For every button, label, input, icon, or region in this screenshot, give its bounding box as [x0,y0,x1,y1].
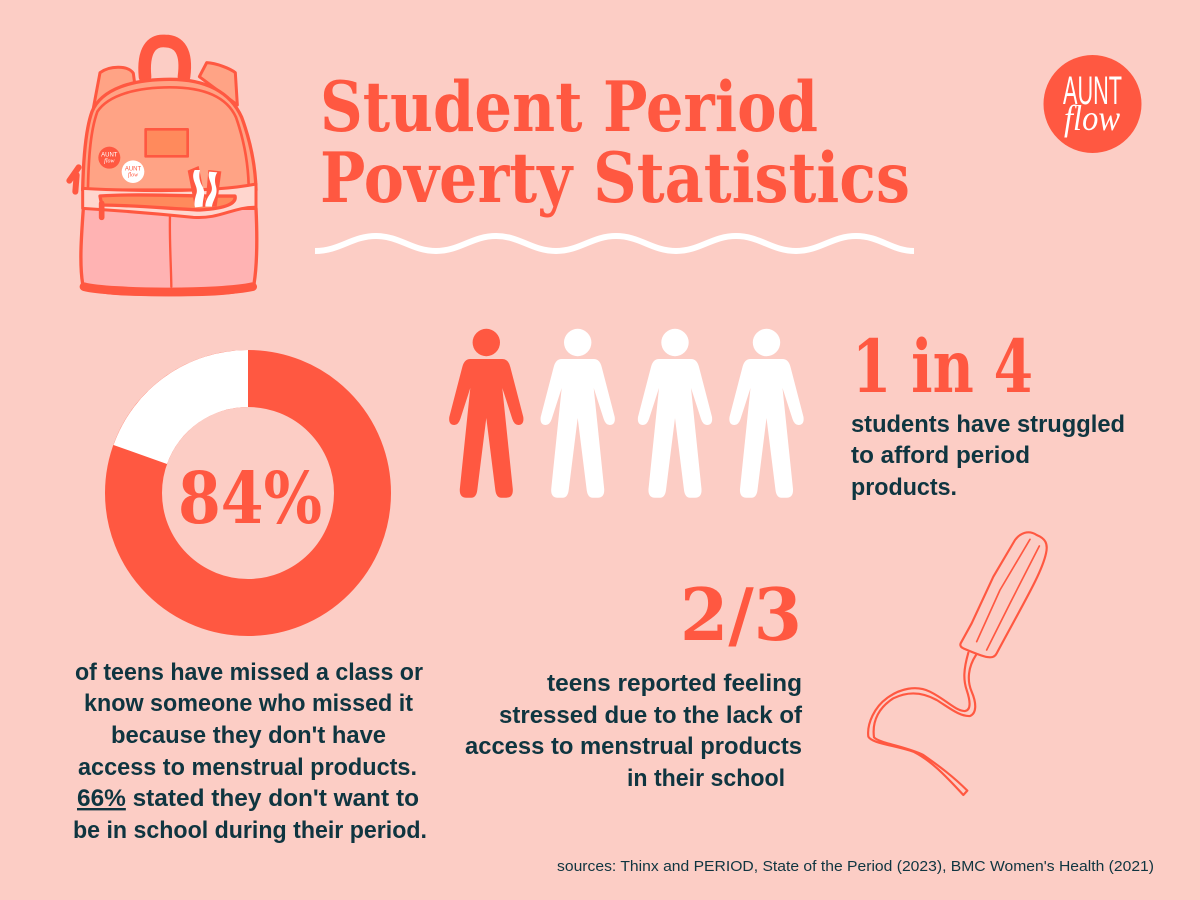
text block: afford products [851,411,1125,501]
left strap [93,67,135,108]
base [84,287,253,292]
text block: afford products: to afford period [851,442,1030,469]
text block: missed class: 66% stated they don't want to [77,785,419,812]
donut value: 84% [178,456,322,540]
title: Student Period [320,67,818,148]
button: coral: flow [104,158,114,165]
person: white 2 [638,329,712,498]
title: Poverty Statistics [320,138,910,219]
person: white 3 [729,329,804,498]
text block: stressed teens: teens reported feeling [547,670,802,697]
text block: missed class [73,659,427,844]
person: coral [449,329,523,498]
pale strip with zipper [83,184,256,218]
title wavy underline [315,236,914,251]
pocket divider [170,215,171,287]
stat: 2/3: 2/3 [680,572,802,657]
person: white 1 [541,329,615,498]
text block: stressed teens: stressed due to the lack of [499,702,803,729]
text block: stressed teens: in their school [627,765,785,792]
right strap [199,63,237,105]
text block: missed class: access to menstrual products. [78,754,417,781]
donut chart: 84% [114,350,362,608]
pictogram: 1 in 4 people [449,329,804,498]
sources footnote: sources: Thinx and PERIOD, State of the Period (2023), BMC Women's Health (2021) [557,859,1154,875]
backpack handle [145,41,185,77]
lower pockets [81,208,257,295]
stat: 1 in 4: 1 in 4 [852,324,1033,410]
upper body [83,79,256,190]
text block: afford products: students have struggled [851,411,1125,438]
text block: stressed teens [465,670,803,792]
icon: backpack illustration [69,41,257,295]
button: coral: AUNT [101,153,118,159]
text block: missed class: because they don't have [111,722,386,749]
title [320,67,910,219]
icon: tampon [868,532,1047,795]
logo: Aunt Flow [1044,55,1142,153]
button: white: AUNT [125,167,141,173]
button: white [122,160,144,183]
logo: Aunt Flow: AUNT [1063,69,1122,113]
button: white: flow [128,172,138,179]
zipper pocket [100,195,235,210]
text block: missed class: of teens have missed a class or [75,659,423,686]
text block: missed class: be in school during their period. [73,817,427,844]
text block: afford products: products. [851,474,957,501]
side zipper charm [69,167,79,192]
tampon wrappers in pocket [188,166,221,207]
inner seam [88,87,249,187]
text block: missed class: know someone who missed it [84,690,413,717]
text block: stressed teens: access to menstrual products [465,733,802,760]
button: coral [98,147,120,169]
zipper pull [93,203,110,217]
logo: Aunt Flow: flow [1064,98,1120,138]
front patch [146,129,188,156]
